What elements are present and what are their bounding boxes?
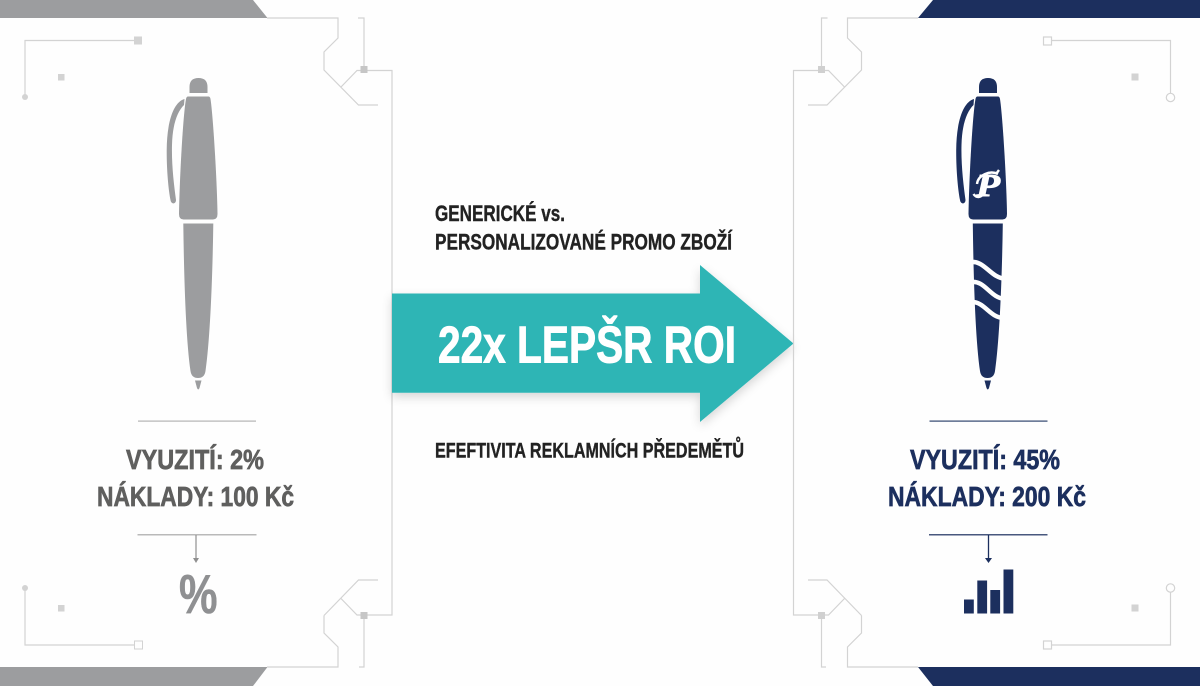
stats: personalized: NÁKLADY: 200 Kč (888, 481, 1086, 512)
stats: personalized: VYUZITÍ: 45% (910, 444, 1060, 475)
panel: personalized promo item (794, 0, 1200, 686)
divider top (930, 420, 1048, 422)
heading (435, 201, 733, 254)
stats: generic: VYUZITÍ: 2% (126, 444, 264, 475)
top grey banner (0, 0, 268, 18)
caption: EFEFTIVITA REKLAMNÍCH PŘEDEMĚTŮ (435, 436, 744, 462)
pen waves (970, 262, 1006, 318)
pen logo P: P (975, 167, 1001, 203)
icon: percent sign: % (179, 563, 218, 625)
stats: generic (97, 444, 294, 512)
panel: generic promo item (0, 0, 392, 686)
heading: GENERICKÉ vs. (435, 201, 565, 226)
icon: bar chart (964, 570, 1013, 614)
circuit frame left panel (22, 18, 392, 667)
arrow: 22x better ROI: 22x LEPŠR ROI (438, 316, 736, 374)
divider top (138, 420, 256, 422)
panel: centre comparison (392, 201, 794, 462)
icon: branded navy pen (956, 78, 1007, 390)
circuit frame right panel (794, 18, 1175, 667)
stats: personalized (888, 444, 1086, 512)
bottom grey banner (0, 667, 268, 686)
bottom navy banner (918, 667, 1200, 686)
arrow: 22x better ROI (392, 265, 794, 422)
heading: PERSONALIZOVANÉ PROMO ZBOŽÍ (435, 230, 733, 254)
icon: grey pen (167, 78, 218, 390)
stats: generic: NÁKLADY: 100 Kč (97, 481, 294, 512)
top navy banner (918, 0, 1200, 18)
arrow down to bar chart (929, 534, 1048, 563)
arrow down to percent icon (138, 534, 256, 563)
